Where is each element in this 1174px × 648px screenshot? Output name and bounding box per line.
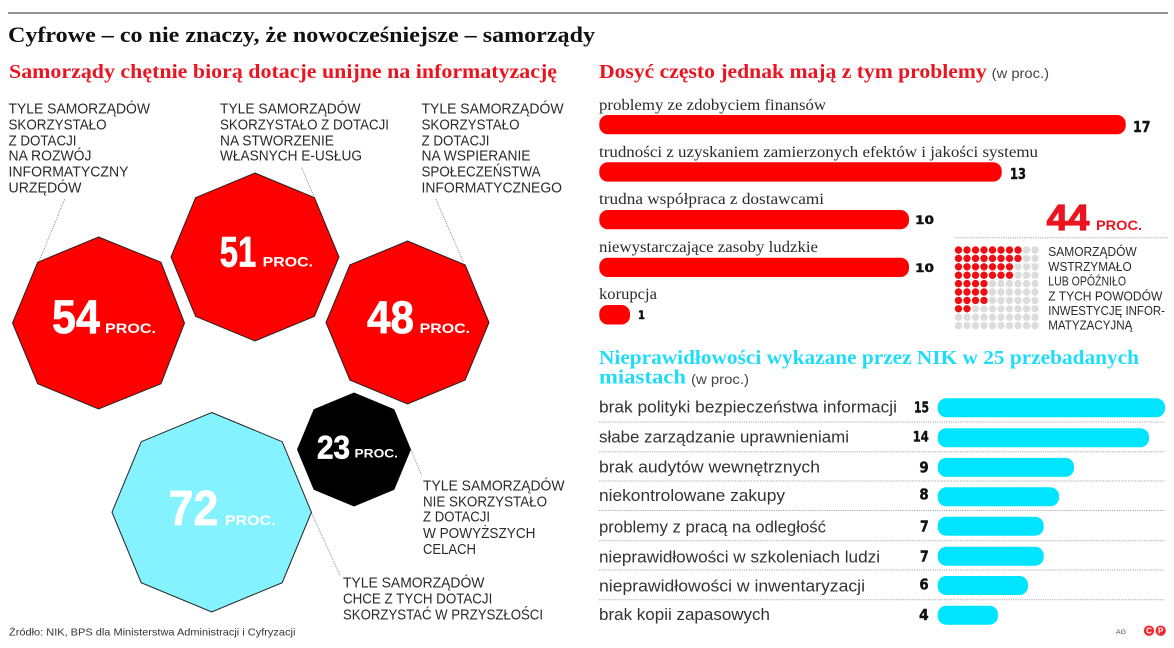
row: inventory 6: nieprawidłowości w inwentaryzacji <box>599 578 865 596</box>
octagon: 51 percent: PROC. <box>263 254 313 270</box>
text: will use in future: CHCE Z TYCH DOTACJI <box>343 590 492 607</box>
octagon: 23 percent: 23 <box>317 429 350 465</box>
text: did not use: TYLE SAMORZĄDÓW <box>423 478 565 495</box>
bar: quality 13: trudności z uzyskaniem zamierzonych efektów i jakości systemu <box>599 144 1038 161</box>
octagon: 54 percent: PROC. <box>105 320 156 336</box>
text: 44 percent caption: INWESTYCJĘ INFOR- <box>1048 304 1165 318</box>
title: Cyfrowe – co nie znaczy, że nowocześniejsze – samorządy <box>8 22 595 47</box>
text: own e-services: WŁASNYCH E-USŁUG <box>220 148 362 165</box>
text: own e-services <box>220 100 389 165</box>
row: security policy 15: brak polityki bezpieczeństwa informacji <box>599 399 897 417</box>
row: backups 4 <box>599 606 998 625</box>
octagon: 72 percent: 72 <box>169 482 218 536</box>
row: inventory 6 <box>599 575 1028 596</box>
octagon: 48 percent <box>326 241 489 404</box>
text: information society: Z DOTACJI <box>422 132 490 149</box>
octagon: 54 percent <box>12 237 184 409</box>
text: information society: SKORZYSTAŁO <box>422 116 520 133</box>
octagon: 72 percent: PROC. <box>225 512 276 528</box>
bar: finance 17: problemy ze zdobyciem finansów <box>599 97 826 114</box>
text: information society <box>422 100 564 197</box>
text: information society: SPOŁECZEŃSTWA <box>422 164 540 181</box>
bar: human resources 10 <box>599 239 934 277</box>
bar: corruption 1: korupcja <box>599 286 657 303</box>
octagon: 72 percent <box>112 412 311 612</box>
text: 44 percent caption: WSTRZYMAŁO <box>1048 260 1132 274</box>
row: audits 9: brak audytów wewnętrznych <box>599 459 820 477</box>
row: training 7: nieprawidłowości w szkoleniach ludzi <box>599 548 880 566</box>
bar: finance 17 <box>599 97 1150 136</box>
author initials: AG <box>1116 629 1126 636</box>
text: 44 percent caption: LUB OPÓŹNIŁO <box>1048 274 1126 289</box>
text: information society: TYLE SAMORZĄDÓW <box>422 100 564 117</box>
heading: problems: Dosyć często jednak mają z tym problemy <box>599 61 987 83</box>
heading: subsidies: Samorządy chętnie biorą dotacje unijne na informatyzację <box>9 61 557 83</box>
leader lines <box>40 168 464 575</box>
text: will use in future: TYLE SAMORZĄDÓW <box>343 575 485 592</box>
heading: NIK findings: miastach <box>599 366 686 388</box>
octagon: 51 percent: 51 <box>220 229 256 277</box>
text: office development: SKORZYSTAŁO <box>8 116 106 133</box>
text: office development: Z DOTACJI <box>8 132 76 149</box>
row: permissions 14: 14 <box>913 430 929 446</box>
text: own e-services: SKORZYSTAŁO Z DOTACJI <box>220 116 389 133</box>
row: inventory 6: 6 <box>919 575 929 593</box>
octagon: 48 percent: PROC. <box>420 320 470 336</box>
heading: NIK findings <box>599 347 1139 388</box>
text: did not use <box>423 478 565 558</box>
octagon: 23 percent: PROC. <box>354 447 398 461</box>
text: office development: TYLE SAMORZĄDÓW <box>8 100 151 117</box>
bar: human resources 10: niewystarczające zasoby ludzkie <box>599 239 818 256</box>
row: purchases 8: niekontrolowane zakupy <box>599 487 786 505</box>
row: audits 9: 9 <box>919 459 929 477</box>
bar: finance 17: 17 <box>1133 118 1150 136</box>
row: backups 4: 4 <box>919 606 929 624</box>
bar: corruption 1: 1 <box>638 308 645 322</box>
heading: NIK findings: Nieprawidłowości wykazane przez NIK w 25 przebadanych <box>599 347 1139 369</box>
stat: 44 percent: 44 <box>1047 197 1089 238</box>
text: 44 percent caption <box>1048 244 1165 332</box>
icon: copyright logo: C <box>1146 627 1152 636</box>
dot grid: 44 of 100 <box>958 250 1035 326</box>
text: office development: INFORMATYCZNY <box>8 164 128 181</box>
panel: problems <box>599 61 1168 332</box>
text: information society: NA WSPIERANIE <box>422 148 530 165</box>
row: purchases 8 <box>599 486 1059 506</box>
text: did not use: W POWYŻSZYCH <box>423 524 536 542</box>
text: office development <box>8 100 151 197</box>
icon: copyright logo: P <box>1158 627 1164 636</box>
source: Źródło: NIK, BPS dla Ministerstwa Administracji i Cyfryzacji <box>9 626 295 639</box>
row: permissions 14: słabe zarządzanie uprawnieniami <box>599 429 849 447</box>
row: remote work 7: 7 <box>920 518 929 536</box>
panel: NIK findings <box>599 347 1165 625</box>
octagon: 23 percent <box>297 392 411 506</box>
text: own e-services: NA STWORZENIE <box>220 132 334 149</box>
heading: NIK findings: (w proc.) <box>691 371 749 387</box>
bar: human resources 10: 10 <box>915 261 934 275</box>
icon: copyright logo <box>1144 626 1166 636</box>
heading: problems: (w proc.) <box>992 65 1049 81</box>
text: did not use: CELACH <box>423 541 476 558</box>
bar: suppliers 10: trudna współpraca z dostawcami <box>599 191 825 208</box>
text: office development: URZĘDÓW <box>8 180 82 197</box>
row: permissions 14 <box>599 428 1149 447</box>
panel: subsidies <box>8 61 565 623</box>
row: remote work 7: problemy z pracą na odległość <box>599 519 826 537</box>
row: security policy 15 <box>599 398 1165 417</box>
text: 44 percent caption: MATYZACYJNĄ <box>1048 318 1133 332</box>
text: 44 percent caption: Z TYCH POWODÓW <box>1048 288 1162 303</box>
text: did not use: NIE SKORZYSTAŁO <box>423 494 547 511</box>
row: training 7 <box>599 547 1044 566</box>
text: office development: NA ROZWÓJ <box>8 148 92 165</box>
text: did not use: Z DOTACJI <box>423 509 490 526</box>
bar: corruption 1 <box>599 286 657 324</box>
row: remote work 7 <box>599 517 1044 537</box>
row: audits 9 <box>599 458 1074 477</box>
text: will use in future <box>343 575 543 623</box>
row: training 7: 7 <box>920 548 929 566</box>
text: information society: INFORMATYCZNEGO <box>422 180 562 197</box>
text: own e-services: TYLE SAMORZĄDÓW <box>220 100 361 117</box>
text: 44 percent caption: SAMORZĄDÓW <box>1048 244 1137 259</box>
row: backups 4: brak kopii zapasowych <box>599 606 770 624</box>
stat: 44 percent <box>955 197 1168 332</box>
bar: quality 13 <box>599 144 1038 183</box>
row: purchases 8: 8 <box>919 486 929 504</box>
octagon: 51 percent <box>171 173 339 341</box>
bar: suppliers 10 <box>599 191 934 229</box>
octagon: 54 percent: 54 <box>52 290 100 343</box>
text: will use in future: SKORZYSTAĆ W PRZYSZŁOŚCI <box>343 605 543 623</box>
bar: suppliers 10: 10 <box>915 213 934 227</box>
bar: quality 13: 13 <box>1010 165 1026 183</box>
stat: 44 percent: PROC. <box>1096 217 1142 233</box>
octagon: 48 percent: 48 <box>367 292 414 343</box>
row: security policy 15: 15 <box>914 399 929 417</box>
